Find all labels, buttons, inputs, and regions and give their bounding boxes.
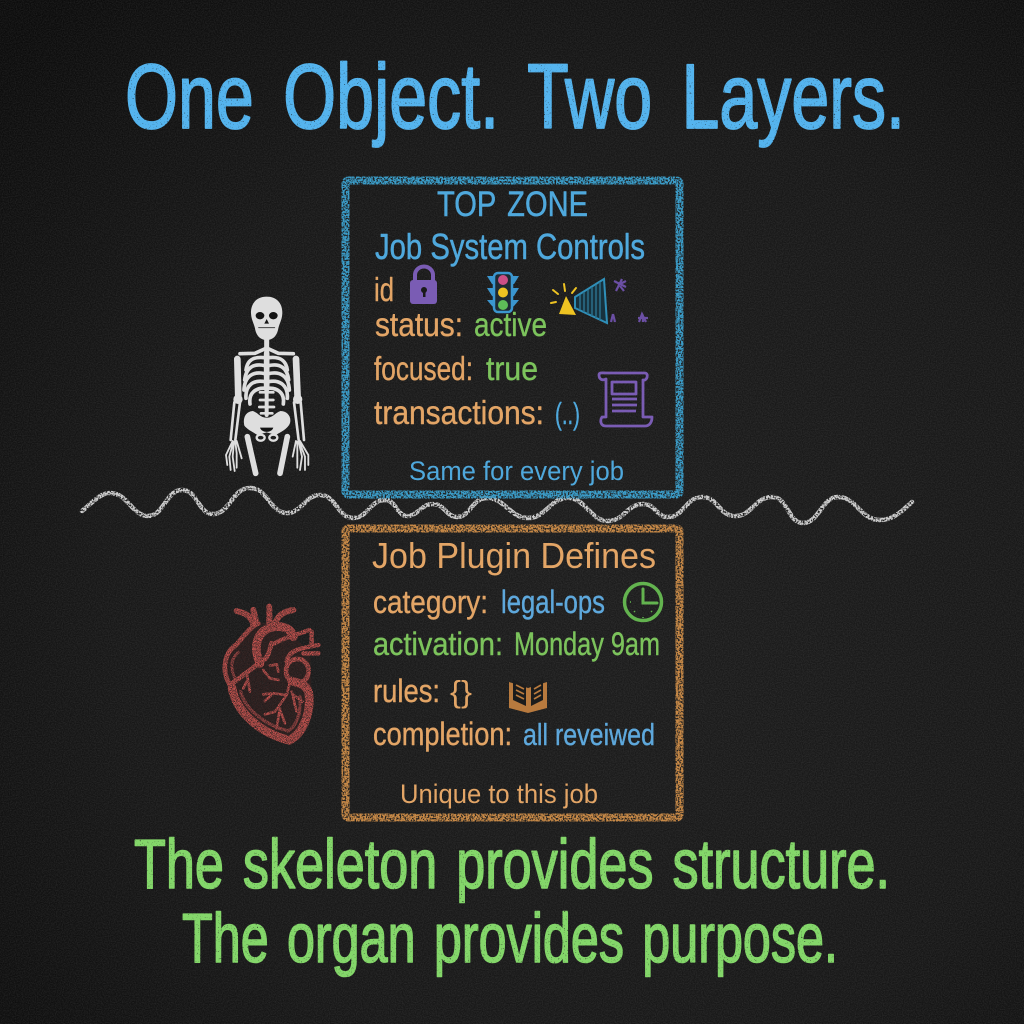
- field: transactions: transactions:: [374, 394, 544, 431]
- panel: job plugin: [346, 528, 680, 818]
- field: category: legal-ops: [501, 584, 605, 620]
- caption: unique to this job: Unique to this job: [400, 779, 598, 809]
- icon: spotlight projector: [551, 279, 607, 323]
- field: completion: completion:: [373, 716, 512, 752]
- field: status: active: [474, 306, 547, 343]
- field: rules: {}: [450, 674, 472, 709]
- field: transactions: (..): [555, 396, 580, 431]
- field: completion: [373, 716, 655, 752]
- field: focused: focused:: [374, 350, 473, 387]
- heading: top zone: TOP ZONE: [437, 185, 588, 224]
- field: status: status:: [375, 306, 463, 343]
- field: completion: all reveiwed: [523, 717, 655, 752]
- field: focused: true: [486, 350, 538, 387]
- field: category: [373, 584, 605, 620]
- panel: top zone: [346, 180, 680, 494]
- icon: traffic light: [487, 273, 519, 312]
- field: activation: Monday 9am: [514, 626, 660, 662]
- caption: same for every job: Same for every job: [409, 456, 624, 486]
- heading: job system controls: Job System Controls: [375, 226, 645, 267]
- wavy divider line: [82, 488, 912, 523]
- job plugin border: [346, 528, 680, 818]
- icon: anatomical heart: [225, 607, 318, 742]
- field: id: id: [374, 271, 394, 308]
- field: rules: rules:: [373, 673, 440, 709]
- icon: small purple marks: [611, 279, 648, 322]
- field: activation: [373, 626, 660, 662]
- field: category: category:: [373, 584, 488, 620]
- closing statement: [134, 825, 890, 977]
- field: status: [375, 306, 547, 343]
- heading: job plugin defines: Job Plugin Defines: [372, 535, 656, 576]
- top zone border: [346, 180, 680, 494]
- icon: open book: [509, 679, 547, 713]
- field: activation: activation:: [373, 626, 503, 662]
- icon: padlock: [410, 266, 437, 304]
- icon: clock: [624, 584, 662, 620]
- icon: skeleton: [226, 297, 308, 473]
- icon: scroll: [599, 373, 652, 426]
